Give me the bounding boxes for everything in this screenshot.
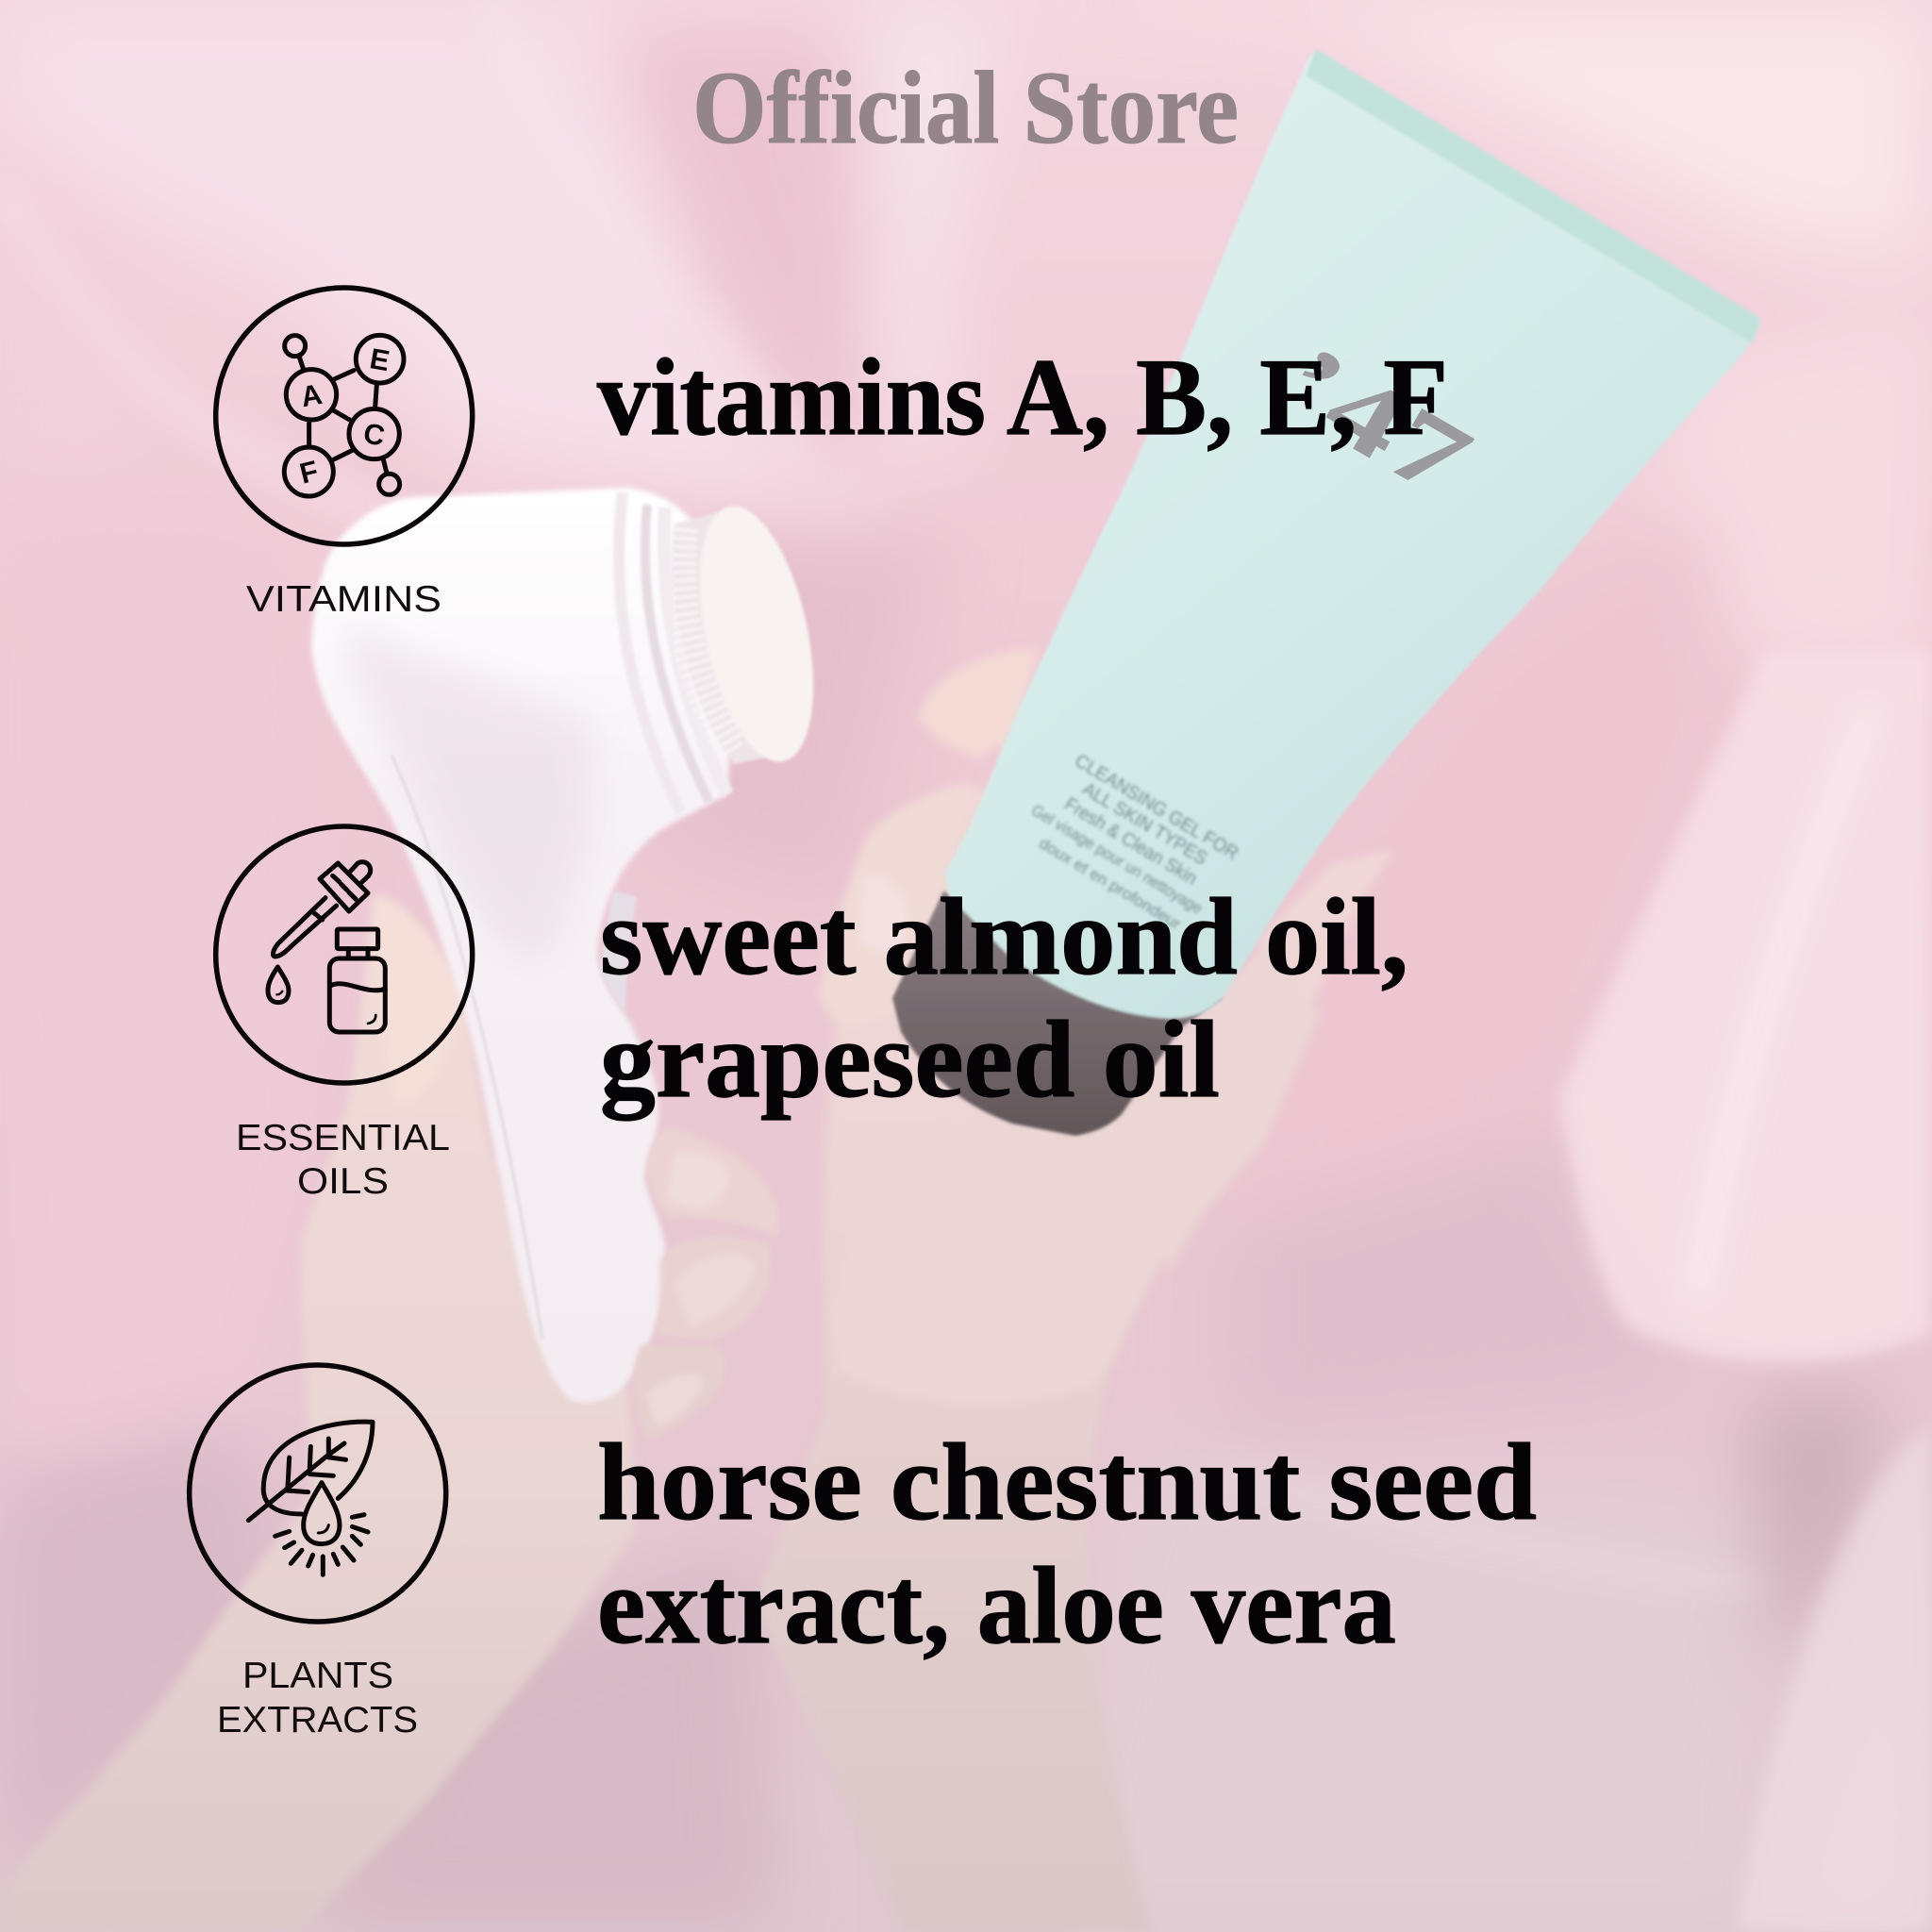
label: essential oils: [236, 1118, 450, 1202]
icon: vitamins molecule: C: [361, 417, 387, 453]
product tube: [892, 49, 1760, 1136]
label: vitamins: VITAMINS: [246, 579, 441, 620]
hand holding the tube: [755, 647, 1395, 1932]
label: plants extracts: [217, 1656, 418, 1740]
icon: plant extracts leaf and drop: [190, 1365, 446, 1622]
icon: vitamins molecule: F: [296, 455, 322, 491]
tube crimped end: [1306, 49, 1760, 343]
tube product copy: doux et en profondeur: [1036, 834, 1184, 933]
tube product copy: ALL SKIN TYPES: [1078, 778, 1210, 870]
tube product copy: [1028, 750, 1241, 933]
label: plants extracts: PLANTS: [242, 1656, 393, 1696]
heading: extracts list: extract, aloe vera: [597, 1545, 1396, 1667]
label: plants extracts: EXTRACTS: [217, 1700, 418, 1740]
icon: essential oils dropper and bottle: [216, 826, 473, 1083]
fingers gripping the brush: [633, 1129, 778, 1440]
icon: vitamins molecule: [216, 288, 473, 544]
heading: extracts list: horse chestnut seed: [597, 1422, 1537, 1543]
heading: extracts list: [597, 1422, 1537, 1667]
heading: oils list: sweet almond oil,: [600, 876, 1408, 998]
tube black cap: [892, 891, 1223, 1136]
brush bristles: [672, 507, 778, 764]
tube logo: ’47: [1264, 323, 1490, 521]
cleansing brush device: [311, 488, 834, 1403]
brush side button: [600, 891, 637, 1015]
icon: vitamins molecule: E: [367, 342, 391, 377]
brush body: [311, 488, 741, 1403]
label: essential oils: ESSENTIAL: [236, 1118, 450, 1158]
brush collar: [619, 492, 727, 813]
icon: vitamins molecule: A: [298, 378, 325, 413]
label: essential oils: OILS: [297, 1161, 389, 1202]
hand holding the cleansing brush: [0, 895, 636, 1932]
tube product copy: Fresh & Clean Skin: [1060, 793, 1201, 890]
heading: oils list: grapeseed oil: [600, 999, 1220, 1121]
heading: oils list: [600, 876, 1408, 1121]
tube product copy: Gel visage pour un nettoyage: [1028, 801, 1206, 918]
brush body shading: [349, 623, 594, 961]
tube product copy: CLEANSING GEL FOR: [1071, 750, 1241, 864]
brush head face: [679, 496, 834, 772]
tube body: [945, 54, 1760, 1019]
heading: vitamins list: vitamins A, B, E, F: [597, 337, 1448, 458]
title: Official Store: [692, 50, 1239, 165]
